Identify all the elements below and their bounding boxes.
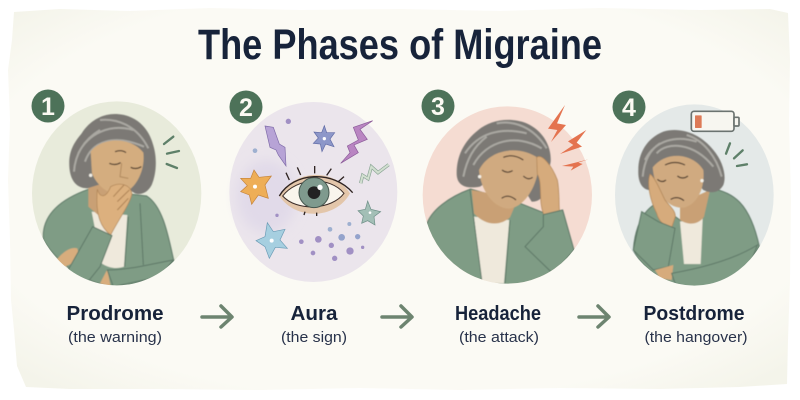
badge 1 <box>32 90 64 122</box>
figure <box>43 114 174 287</box>
label: postdrome <box>644 303 748 346</box>
badge 4: 4 <box>622 94 636 122</box>
illustration: yawning woman <box>32 101 201 287</box>
label: prodrome: Prodrome <box>66 303 164 325</box>
icon: low battery <box>691 111 739 131</box>
figure <box>633 130 759 290</box>
icon: star blue-purple <box>313 126 335 152</box>
illustration: eye and visual disturbances <box>229 102 397 282</box>
panel: prodrome <box>32 90 201 346</box>
badge 2 <box>230 90 262 124</box>
label: headache: (the attack) <box>459 329 539 346</box>
panel: aura <box>229 90 397 346</box>
figure <box>426 120 574 287</box>
label: postdrome: Postdrome <box>644 303 744 325</box>
star sparkles <box>253 137 371 243</box>
badge 2: 2 <box>239 94 253 122</box>
icon: star light blue <box>256 223 287 258</box>
icon: lightning magenta <box>341 121 373 163</box>
panel: postdrome <box>612 90 774 346</box>
icon: lightning purple <box>265 126 286 166</box>
title: The Phases of Migraine <box>198 21 602 69</box>
panel: headache <box>422 90 592 346</box>
dots <box>253 119 364 261</box>
icon: zigzag green <box>361 165 389 183</box>
label: aura: (the sign) <box>281 329 347 346</box>
icon: fatigue ticks <box>726 143 747 166</box>
background circle: lilac <box>229 102 397 282</box>
icon: alert ticks <box>164 137 179 168</box>
arrow 1 <box>202 306 232 327</box>
illustration: exhausted woman <box>615 104 774 290</box>
label: headache <box>455 303 541 346</box>
arrow 2 <box>382 306 412 327</box>
icon: pain bolts <box>548 105 588 171</box>
badge 4 <box>612 90 646 124</box>
background circle: blue-grey <box>615 104 774 286</box>
icon: star teal <box>358 201 381 225</box>
background circle: pink <box>423 106 592 284</box>
illustration: woman holding head <box>423 105 592 287</box>
label: aura: Aura <box>290 303 338 325</box>
label: prodrome: (the warning) <box>68 329 162 346</box>
label: aura <box>281 303 347 346</box>
label: prodrome <box>66 303 164 346</box>
badge 3: 3 <box>431 93 445 121</box>
background circle: green <box>32 101 201 285</box>
icon: star orange <box>241 170 271 204</box>
label: postdrome: (the hangover) <box>644 329 748 346</box>
arrow 3 <box>579 306 609 327</box>
icon: eye <box>279 166 353 216</box>
badge 3 <box>422 90 454 122</box>
label: headache: Headache <box>455 303 541 325</box>
badge 1: 1 <box>41 93 55 121</box>
